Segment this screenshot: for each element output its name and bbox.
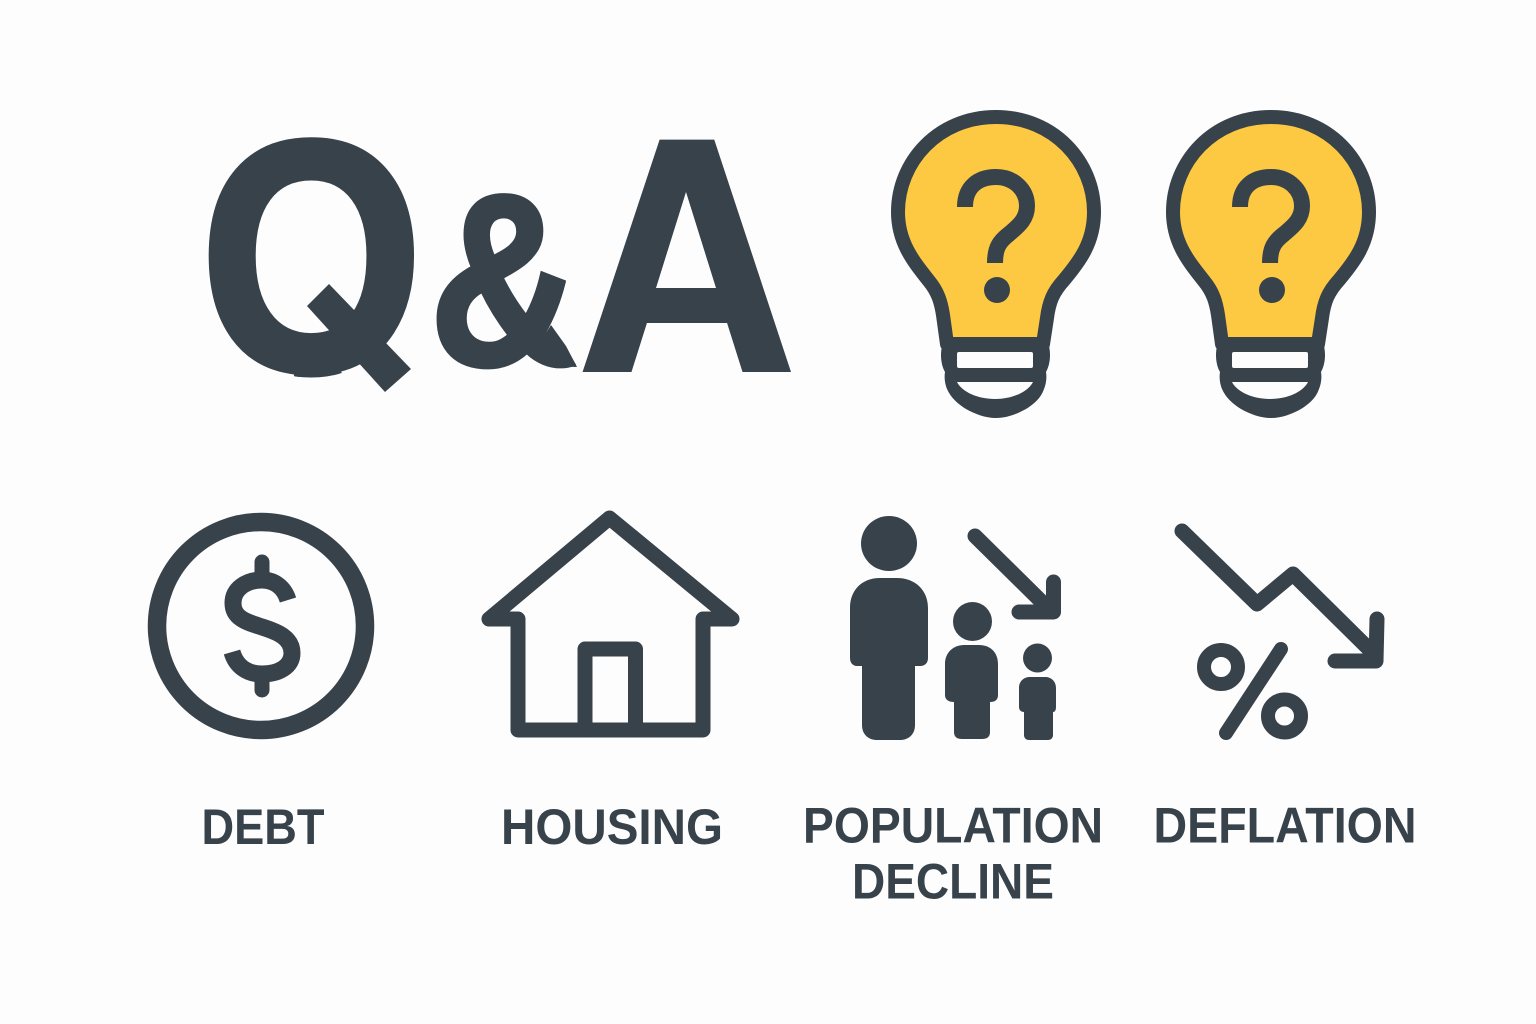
letter Q bbox=[208, 137, 414, 392]
letter Q: Q bbox=[200, 72, 424, 440]
middle figure bbox=[945, 602, 998, 739]
label: housing: HOUSING bbox=[501, 799, 723, 855]
percent sign bbox=[1204, 649, 1301, 733]
small figure bbox=[1019, 644, 1056, 740]
falling trend arrow bbox=[1182, 531, 1377, 661]
label: population decline: POPULATION bbox=[803, 798, 1103, 854]
downward arrow bbox=[975, 536, 1054, 612]
title: Q&A bbox=[208, 137, 791, 392]
label: deflation: DEFLATION bbox=[1154, 798, 1416, 854]
adult figure bbox=[850, 516, 928, 740]
icon: population decline bbox=[850, 516, 1056, 740]
icon: light bulb with question mark 1 bbox=[898, 117, 1094, 418]
icon: deflation trend with percent bbox=[1182, 531, 1377, 733]
ampersand: & bbox=[430, 144, 580, 416]
icon: house bbox=[489, 518, 732, 730]
icon: dollar coin bbox=[157, 522, 365, 730]
label: population decline bbox=[803, 798, 1103, 910]
icon: light bulb with question mark 2 bbox=[1173, 117, 1369, 418]
label: debt: DEBT bbox=[202, 799, 324, 855]
label: population decline: DECLINE bbox=[852, 854, 1054, 910]
letter A: A bbox=[579, 71, 795, 439]
